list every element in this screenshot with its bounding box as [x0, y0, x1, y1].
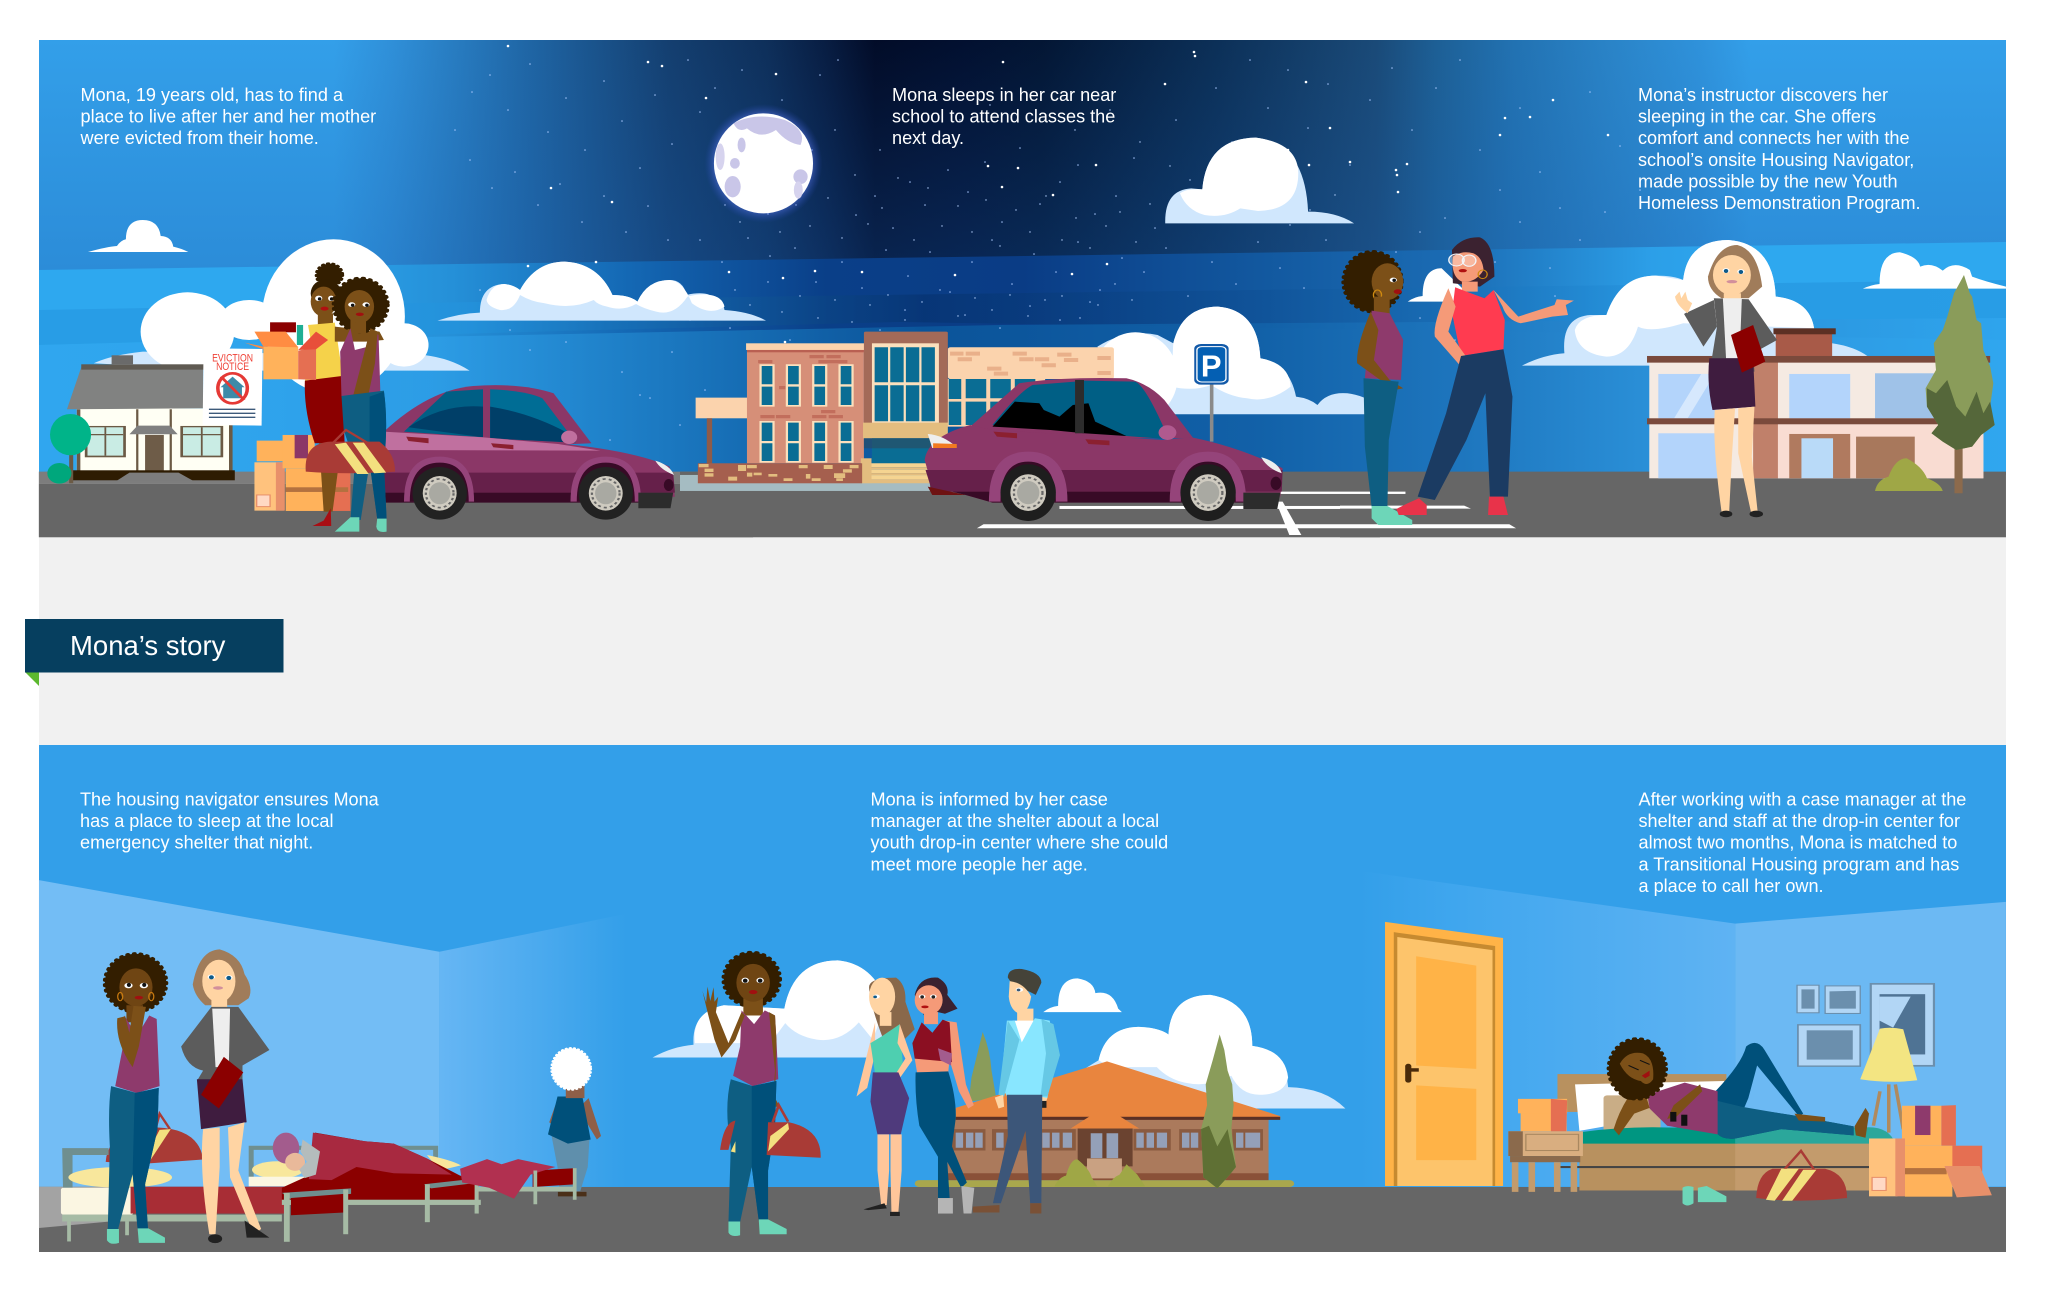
duffel bag [106, 1114, 203, 1164]
text block: step 2: next day. [892, 128, 964, 148]
parking sign [1194, 344, 1229, 442]
stars [455, 46, 1640, 440]
Mona figure with duffel [306, 278, 395, 532]
friend in green top [857, 978, 915, 1216]
Mona waving [702, 952, 787, 1236]
cloud small [1043, 978, 1122, 1012]
school windows [759, 364, 854, 463]
housing navigator [1675, 245, 1777, 517]
text block: step 1: Mona, 19 years old, has to find a [80, 85, 344, 105]
small cloud [1408, 268, 1471, 302]
text block: step 1: were evicted from their home. [80, 128, 319, 148]
eviction notice [203, 348, 262, 426]
sneakers [1683, 1186, 1726, 1205]
floor [39, 1187, 2006, 1252]
text block: step 6: After working with a case manager at the [1638, 790, 1966, 810]
parking lines [977, 492, 1380, 535]
bed foot rail [282, 1178, 480, 1242]
nightstand [1508, 1099, 1583, 1192]
text block: step 2: school to attend classes the [892, 107, 1115, 127]
text block: step 3: school’s onsite Housing Navigator, [1638, 150, 1914, 170]
parking sign: P [1201, 349, 1222, 384]
cloud long [437, 262, 766, 321]
bush [1875, 458, 1943, 491]
text block: step 1: place to live after her and her mother [80, 107, 376, 127]
text block: step 5: youth drop-in center where she could [870, 833, 1168, 853]
scene 5: drop-in center [653, 952, 1345, 1236]
duffel bag [720, 1105, 821, 1158]
car 1 [379, 385, 675, 520]
tree [47, 414, 91, 484]
scene 3: instructor and navigator [1340, 237, 2006, 537]
eviction notice: EVICTION [212, 352, 253, 364]
moving boxes [254, 435, 350, 511]
Mona standing profile [1344, 252, 1412, 525]
panel: middle grey band [39, 537, 2006, 745]
sky gradient [39, 40, 2006, 475]
Mona worried [105, 954, 166, 1244]
text block: step 4: The housing navigator ensures Mona [80, 790, 380, 810]
cypress tree [1926, 275, 1995, 493]
windows [952, 1129, 1263, 1151]
ground right [1340, 472, 2006, 537]
scene 2: sleeping in the car [680, 104, 1381, 537]
woman walking away with white hair [548, 1048, 601, 1196]
text block: step 5: Mona is informed by her case [870, 790, 1108, 810]
car 2 with sleeping Mona [925, 378, 1283, 521]
wall pictures [1797, 984, 1934, 1066]
tree behind friends [969, 1032, 996, 1102]
text block: step 6: almost two months, Mona is matched to [1638, 833, 1957, 853]
text block: step 3: comfort and connects her with the [1638, 128, 1910, 148]
Mona resting on bed [1609, 1039, 1869, 1139]
moving boxes [1869, 1105, 1992, 1197]
instructor [1396, 237, 1574, 515]
text block: step 5: meet more people her age. [870, 854, 1088, 874]
navigator with folder [181, 949, 269, 1243]
text block: step 4: emergency shelter that night. [80, 833, 313, 853]
text block: step 4: has a place to sleep at the local [80, 811, 333, 831]
cloud right [1059, 995, 1345, 1109]
cloud behind house [94, 239, 470, 394]
ground [680, 472, 1380, 537]
floor lamp [1860, 1028, 1917, 1133]
mother figure [305, 264, 384, 526]
eviction notice: NOTICE [216, 361, 249, 373]
school building [696, 332, 1114, 483]
bed [1557, 1074, 1895, 1190]
sidewalk behind house [39, 472, 708, 484]
road [39, 484, 753, 537]
text block: step 3: Mona’s instructor discovers her [1638, 85, 1888, 105]
friend in red top [912, 977, 974, 1214]
friend in blue sweater [973, 969, 1060, 1214]
cloud left [653, 960, 887, 1058]
door [1385, 922, 1503, 1186]
carried box [245, 322, 328, 380]
scene 4: emergency shelter [39, 880, 626, 1244]
house [67, 355, 235, 481]
near bed [61, 1148, 286, 1241]
modern house [1647, 328, 1990, 478]
sleeper's bed [249, 1133, 481, 1242]
parking lines [1340, 492, 1516, 528]
panel: top story strip [39, 40, 2006, 537]
third bed and blanket [460, 1159, 577, 1204]
scene 1: eviction [39, 220, 766, 537]
scene 6: transitional housing [1360, 871, 2006, 1205]
text block: step 5: manager at the shelter about a local [870, 811, 1159, 831]
shelter room walls [39, 880, 626, 1228]
cypress tree [1201, 1034, 1236, 1188]
text block: step 6: a place to call her own. [1638, 876, 1824, 896]
text block: step 3: Homeless Demonstration Program. [1638, 193, 1921, 213]
heading ribbon: Mona's story: Mona’s story [70, 630, 226, 661]
drop-in center building [915, 1061, 1294, 1187]
cloud top right [1863, 252, 2006, 289]
text block: step 6: shelter and staff at the drop-in center for [1638, 811, 1960, 831]
text block: step 2: Mona sleeps in her car near [892, 85, 1116, 105]
wall backdrop [39, 745, 2006, 1252]
text block: step 3: made possible by the new Youth [1638, 171, 1898, 191]
moon [705, 104, 822, 223]
bedroom walls [1360, 871, 2006, 1187]
cloud behind school [1093, 307, 1381, 421]
panel: bottom story strip [39, 745, 2006, 1252]
cloud small [88, 220, 188, 252]
cloud behind navigator [1522, 240, 1868, 366]
back of far bed [249, 1146, 461, 1178]
cloud right [1165, 138, 1354, 223]
duffel bag [1756, 1151, 1847, 1201]
heading ribbon: Mona's story [25, 619, 284, 686]
text block: step 6: a Transitional Housing program and has [1638, 854, 1959, 874]
text block: step 3: sleeping in the car. She offers [1638, 107, 1876, 127]
